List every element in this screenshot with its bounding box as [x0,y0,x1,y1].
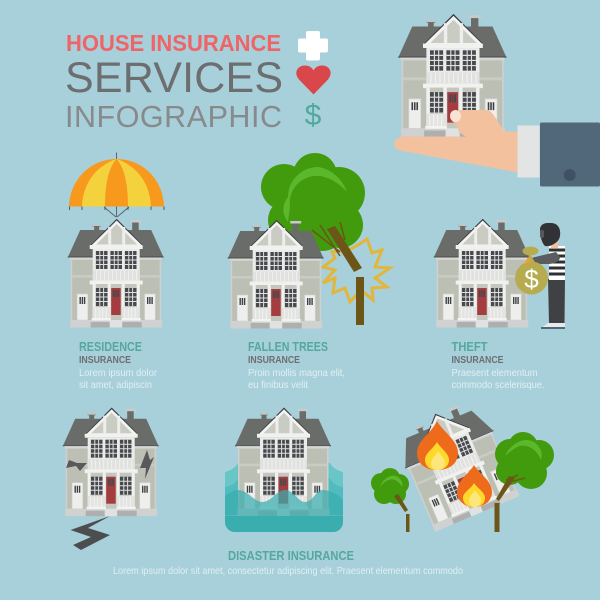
label: fallen trees insurance: eu finibus velit [248,379,308,391]
tree crown [261,153,365,251]
label: residence insurance: INSURANCE [79,354,131,366]
wall crack left [66,460,87,471]
house [63,408,159,516]
impact star [323,239,390,302]
label: disaster insurance: DISASTER INSURANCE [228,548,354,563]
sleeve button [564,169,576,181]
large flame [417,421,458,470]
label: fallen trees insurance: FALLEN TREES [248,339,328,354]
neck [551,240,558,248]
label: disaster insurance [113,548,463,577]
small flame [457,465,492,507]
crown highlight [283,167,347,222]
illustration: flooded house [225,408,343,532]
mid water [225,478,343,515]
icon: medical cross [298,31,328,60]
arm [531,252,560,264]
illustration: fallen tree on house [228,153,390,328]
burglar [531,223,565,329]
umbrella [69,152,164,217]
dollar on bag: $ [524,264,539,294]
branches [312,222,345,256]
back water [225,463,343,515]
label: theft insurance: INSURANCE [452,354,504,366]
label: residence insurance: Lorem ipsum dolor [79,367,157,379]
front water [225,490,343,532]
burning house [390,395,521,533]
hand [394,110,518,172]
illustration: residence, umbrella over house [68,152,164,328]
label: fallen trees insurance: INSURANCE [248,354,300,366]
left tree [371,468,410,532]
thumbnail [450,110,461,122]
label: theft insurance: Praesent elementum [452,367,538,379]
title line: services: SERVICES [65,54,283,102]
torso stripes [549,246,565,280]
shirt cuff [518,126,540,178]
illustration: theft, burglar with money bag [434,219,565,329]
house [235,408,331,516]
legs [548,279,565,323]
house [228,220,324,328]
label: residence insurance: sit amet, adipiscin [79,379,152,391]
water base [225,516,343,532]
broken trunk [327,226,362,272]
label: fallen trees insurance: Proin mollis magna elit, [248,367,345,379]
wall crack right [140,450,154,479]
title line: infographic: INFOGRAPHIC [65,100,282,134]
icon: dollar sign: $ [305,99,322,132]
label: residence insurance [79,339,157,391]
label: theft insurance: commodo scelerisque. [452,379,544,391]
label: residence insurance: RESIDENCE [79,339,142,354]
illustration: house held in hand [394,14,600,186]
jacket sleeve [540,122,600,186]
trunk stump [356,277,364,325]
house [68,219,164,328]
icon: heart [296,66,331,94]
label: theft insurance [452,339,544,391]
illustration: earthquake cracked house [63,408,159,550]
label: fallen trees insurance [248,339,345,391]
shoes [540,323,565,329]
right tree [494,432,554,532]
title [65,30,283,134]
label: disaster insurance: Lorem ipsum dolor sit amet, consectetur adipiscing elit. Praesent elementum commodo [113,565,463,577]
house on palm [398,14,507,137]
ground crack [70,516,110,550]
illustration: house on fire between trees [371,395,554,533]
label: theft insurance: THEFT [452,339,488,354]
title line: house insurance: HOUSE INSURANCE [66,30,281,56]
head mask [540,223,560,246]
house [434,219,530,328]
